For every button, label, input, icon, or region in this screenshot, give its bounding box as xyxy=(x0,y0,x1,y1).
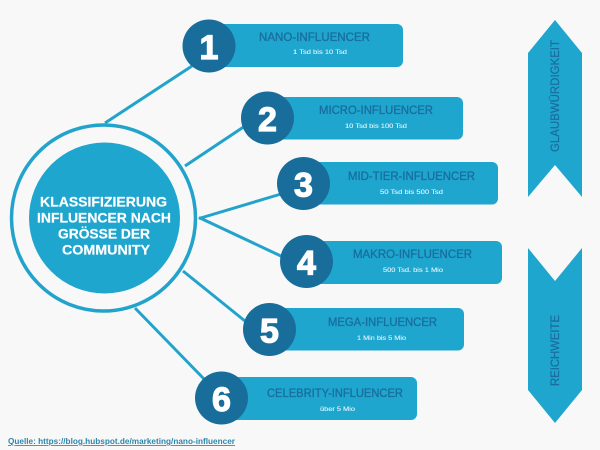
arrow: Glaubwürdigkeit (up): GLAUBWÜRDIGKEIT xyxy=(548,39,562,152)
item 6: celebrity-influencer: über 5 Mio xyxy=(320,406,355,413)
item 4: makro-influencer: 4 xyxy=(297,244,316,282)
item 6: celebrity-influencer: CELEBRITY-INFLUENCER xyxy=(267,388,403,400)
item 4: makro-influencer: MAKRO-INFLUENCER xyxy=(353,249,472,261)
central title: INFLUENCER NACH xyxy=(37,210,171,226)
arrow: Reichweite (down): REICHWEITE xyxy=(548,315,562,386)
item 6: celebrity-influencer xyxy=(195,372,417,424)
item 4: makro-influencer xyxy=(280,235,502,288)
item 2: micro-influencer: 10 Tsd bis 100 Tsd xyxy=(345,123,407,130)
item 5: mega-influencer xyxy=(243,303,464,356)
item 3: mid-tier-influencer: 3 xyxy=(294,166,313,204)
arrow: Glaubwürdigkeit (up) xyxy=(528,20,582,197)
item 2: micro-influencer: 2 xyxy=(258,101,277,139)
item 5: mega-influencer: 5 xyxy=(260,312,279,350)
item 5: mega-influencer: 1 Min bis 5 Mio xyxy=(357,335,406,342)
central circle xyxy=(12,125,196,311)
source link: Quelle: https://blog.hubspot.de/marketing/nano-influencer xyxy=(8,436,236,446)
item 3: mid-tier-influencer xyxy=(277,157,498,210)
item 2: micro-influencer: MICRO-INFLUENCER xyxy=(319,105,433,117)
central title: COMMUNITY xyxy=(62,242,150,258)
item 1: nano-influencer: NANO-INFLUENCER xyxy=(259,32,370,44)
central title xyxy=(37,194,171,258)
item 3: mid-tier-influencer: 50 Tsd bis 500 Tsd xyxy=(380,189,443,196)
connector lines xyxy=(105,66,283,380)
item 4: makro-influencer: 500 Tsd. bis 1 Mio xyxy=(383,267,443,274)
item 6: celebrity-influencer: 6 xyxy=(212,381,231,419)
item 5: mega-influencer: MEGA-INFLUENCER xyxy=(328,317,437,329)
item 3: mid-tier-influencer: MID-TIER-INFLUENCER xyxy=(348,171,475,183)
central title: KLASSIFIZIERUNG xyxy=(40,194,167,210)
arrow: Reichweite (down) xyxy=(528,248,582,423)
item 2: micro-influencer xyxy=(241,92,463,144)
item 1: nano-influencer: 1 Tsd bis 10 Tsd xyxy=(293,49,347,56)
central title: GRÖSSE DER xyxy=(58,226,150,242)
item 1: nano-influencer xyxy=(182,20,403,72)
item 1: nano-influencer: 1 xyxy=(200,29,218,67)
